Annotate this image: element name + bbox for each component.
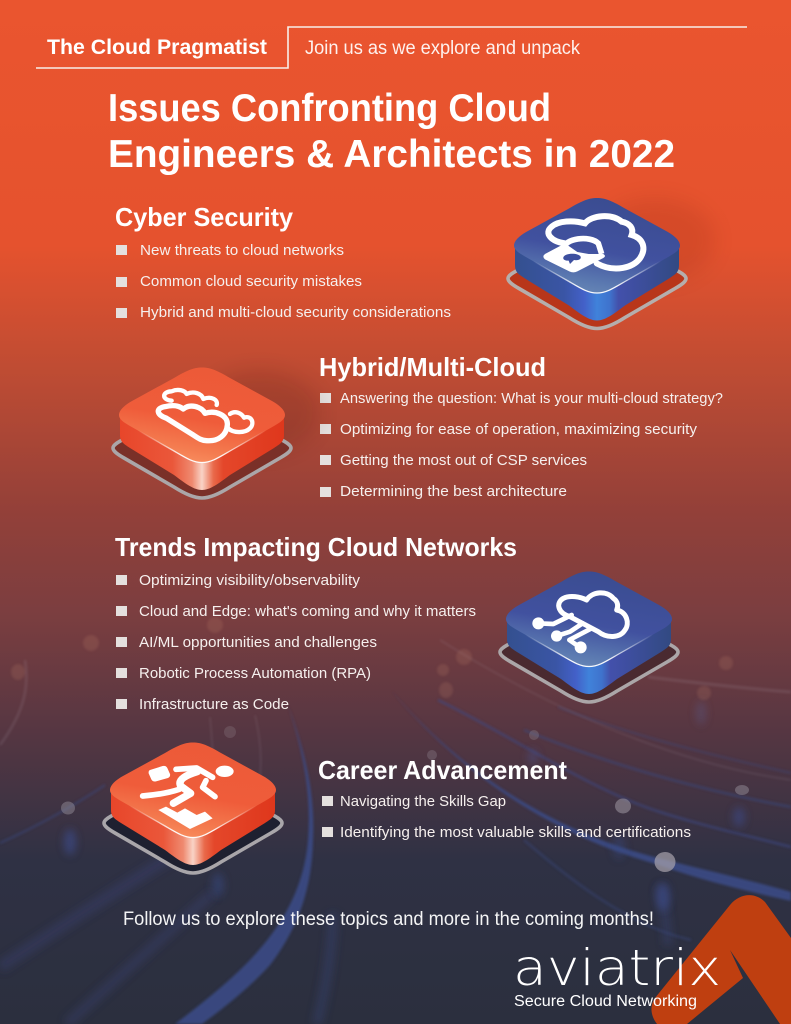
logo wordmark: aviatrix (513, 939, 721, 997)
bullet list (320, 390, 723, 500)
bullet list (116, 242, 451, 321)
title (108, 87, 675, 176)
panel: cyber security (115, 198, 715, 328)
bullet list: Optimizing for ease of operation, maximizing security (340, 421, 698, 438)
header: tagline: Join us as we explore and unpack (305, 38, 580, 59)
panel: trends impacting cloud networks (115, 532, 678, 713)
bullet list: Navigating the Skills Gap (340, 793, 506, 810)
background: light trails and bokeh (0, 617, 791, 1024)
panel: career advancement (104, 742, 691, 873)
bullet list: Hybrid and multi-cloud security considerations (140, 304, 451, 321)
icon: cloud lock button (508, 198, 715, 328)
title: Issues Confronting Cloud (108, 87, 551, 130)
icon: cloud circuit button (500, 572, 678, 702)
title: Engineers & Architects in 2022 (108, 133, 675, 176)
icon: multi-cloud button (113, 368, 320, 498)
bullet list: Common cloud security mistakes (140, 273, 362, 290)
panel: hybrid multi-cloud (113, 352, 723, 500)
bullet list (322, 793, 691, 841)
bullet list: Robotic Process Automation (RPA) (139, 665, 371, 682)
heading: Cyber Security (115, 202, 294, 232)
heading: Trends Impacting Cloud Networks (115, 532, 517, 562)
bullet list (116, 572, 476, 713)
bullet list: Cloud and Edge: what's coming and why it matters (139, 603, 476, 620)
bullet list: Answering the question: What is your multi-cloud strategy? (340, 390, 723, 407)
logo mark: orange triangle (651, 895, 791, 1024)
logo tagline: Secure Cloud Networking (514, 993, 697, 1010)
bullet list: Infrastructure as Code (139, 696, 289, 713)
heading: Career Advancement (318, 755, 567, 785)
icon: running figure button (104, 742, 282, 873)
footer call to action: Follow us to explore these topics and more in the coming months! (123, 909, 654, 930)
header tab outline (36, 27, 747, 68)
bullet list: New threats to cloud networks (140, 242, 344, 259)
bullet list: Determining the best architecture (340, 483, 567, 500)
heading: Hybrid/Multi-Cloud (319, 352, 546, 382)
header: series name: The Cloud Pragmatist (47, 36, 267, 59)
bullet list: AI/ML opportunities and challenges (139, 634, 377, 651)
bullet list: Identifying the most valuable skills and certifications (340, 824, 691, 841)
bullet list: Getting the most out of CSP services (340, 452, 587, 469)
bullet list: Optimizing visibility/observability (139, 572, 361, 589)
